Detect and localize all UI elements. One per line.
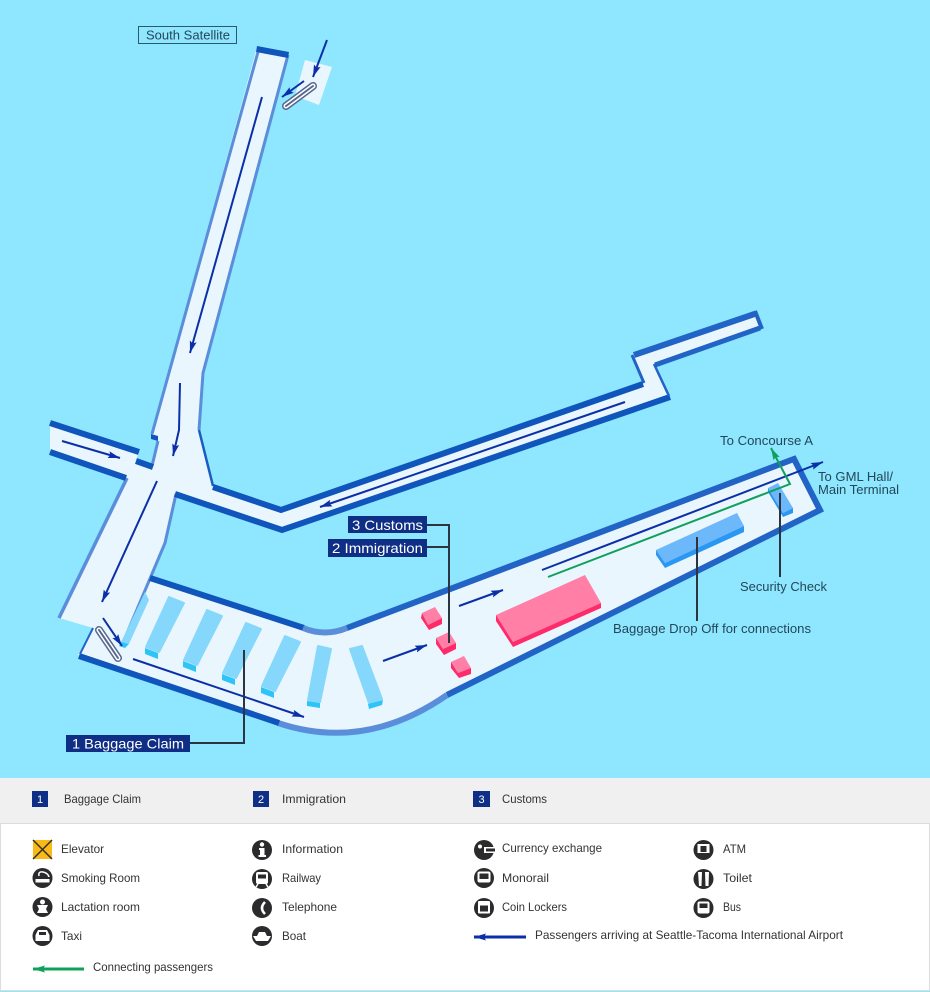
label: To Concourse A: To Concourse A <box>720 433 813 448</box>
carousel 1 <box>145 597 184 659</box>
leader lines <box>189 493 780 743</box>
label: To GML Hall / Main Terminal <box>818 469 899 497</box>
text: Taxi: Taxi <box>61 929 82 943</box>
key band: numbered facilities <box>0 778 930 823</box>
floor: arrivals hall <box>78 457 821 732</box>
large pink block <box>496 575 601 647</box>
carousel 6 <box>350 646 383 709</box>
carousel strip by the wall <box>119 592 149 648</box>
legend panel <box>0 824 930 990</box>
text: Bus: Bus <box>723 900 741 914</box>
text: Railway: Railway <box>282 871 321 885</box>
text: Passengers arriving: Passengers arriving at Seattle-Tacoma International Airport <box>535 928 844 942</box>
text: Monorail: Monorail <box>502 871 549 885</box>
floor: concourse and wings <box>50 47 762 645</box>
carousel 3 <box>222 623 261 685</box>
text: Lactation room: Lactation room <box>61 900 140 914</box>
icon: lactation room <box>32 897 52 917</box>
text: Boat: Boat <box>282 929 307 943</box>
icon: monorail <box>474 868 494 888</box>
text: Currency exchange: Currency exchange <box>502 841 602 855</box>
text: Connecting passengers: Connecting passengers <box>93 960 213 974</box>
icon: taxi <box>32 926 52 946</box>
key 3: Customs <box>502 792 547 806</box>
icon: ATM <box>694 840 714 860</box>
wall cap and notch <box>151 46 289 441</box>
label: 3 Customs: 3 Customs <box>352 517 423 533</box>
baggage carousels <box>119 592 383 709</box>
desk 1 <box>421 607 442 630</box>
key 3 <box>473 791 547 807</box>
security check block <box>768 483 793 517</box>
label: To GML Hall / Main Terminal: Main Terminal <box>818 482 899 497</box>
icon: information <box>252 840 272 860</box>
icon: smoking room <box>32 868 52 888</box>
text: Information: Information <box>282 842 343 856</box>
icon: elevator <box>33 840 52 859</box>
desk 3 <box>451 656 471 678</box>
key 2: Immigration <box>282 792 346 806</box>
text: Toilet: Toilet <box>723 871 753 885</box>
icon: toilet <box>694 869 714 889</box>
arrow: connecting passengers <box>548 448 790 577</box>
label: South Satellite: South Satellite <box>146 28 230 42</box>
text: Telephone: Telephone <box>282 900 337 914</box>
customs and immigration desks <box>421 575 601 678</box>
baggage drop off block <box>656 513 744 568</box>
label: Security Check: Security Check <box>740 579 827 594</box>
terminal floor plan <box>50 46 821 733</box>
carousel 2 <box>183 610 222 672</box>
key 1: 1 <box>37 794 43 806</box>
icon: boat <box>252 926 272 946</box>
icon: railway <box>252 869 272 889</box>
key 1 <box>32 791 141 807</box>
escalators <box>99 86 313 658</box>
icon: coin lockers <box>474 898 494 918</box>
carousel 4 <box>261 636 300 698</box>
icon: currency exchange <box>474 840 495 860</box>
walls <box>50 52 820 733</box>
label: To GML Hall / Main Terminal: To GML Hall/ <box>818 469 893 484</box>
key 1: Baggage Claim <box>64 792 141 806</box>
icon: connecting passengers arrow <box>33 968 84 970</box>
text: Elevator: Elevator <box>61 842 104 856</box>
label: Baggage Drop Off for connections: Baggage Drop Off for connections <box>613 621 812 636</box>
icon: telephone <box>252 898 272 918</box>
key 2 <box>253 791 346 807</box>
carousel 5 <box>307 646 331 708</box>
arrows: arriving passengers <box>62 40 823 717</box>
icon: bus <box>694 898 714 918</box>
key 3: 3 <box>478 794 485 806</box>
icon: arriving passengers arrow <box>474 936 526 938</box>
icon: baggage hall escalator <box>99 630 118 658</box>
desk 2 <box>436 632 456 655</box>
icon: south satellite escalator <box>286 86 313 106</box>
text: ATM: ATM <box>723 842 746 856</box>
South Satellite stair landing <box>295 60 332 105</box>
text: Smoking Room: Smoking Room <box>61 871 140 885</box>
label: 2 Immigration: 2 Immigration <box>332 540 423 556</box>
text: Coin Lockers: Coin Lockers <box>502 900 567 914</box>
key 2: 2 <box>258 794 264 806</box>
label: 1 Baggage Claim: 1 Baggage Claim <box>72 736 184 752</box>
